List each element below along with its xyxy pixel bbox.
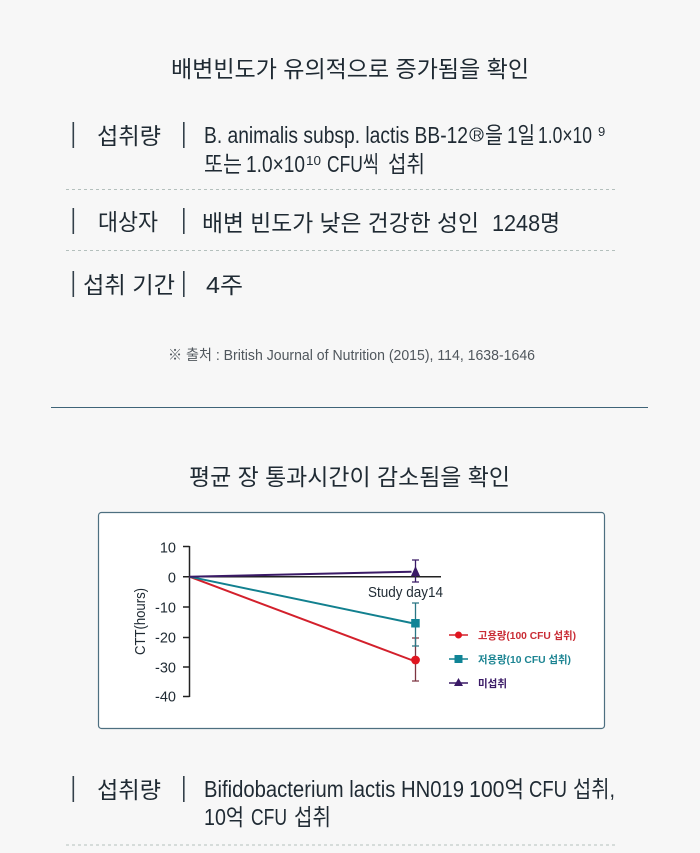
row: intake period: 4주 [206,272,243,298]
row: subjects: 배변 빈도가 낮은 건강한 성인 [202,210,479,236]
row: intake amount second study: 10억 [204,804,244,830]
y axis: -10 [155,600,176,616]
row: subjects: 1248명 [492,210,560,236]
source citation: ※ 출처 : British Journal of Nutrition (2015), 114, 1638-1646 [168,347,535,364]
legend: 미섭취 [478,677,507,690]
row: intake amount: 10 [306,154,321,168]
series: no intake [190,560,420,582]
legend: 저용량(10 CFU 섭취) [478,653,571,666]
series: high dose [190,577,420,681]
row: intake period [72,271,243,298]
row: subjects: 대상자 [98,209,158,235]
row: intake amount second study: Bifidobacterium lactis HN019 [204,776,464,802]
x axis: Study day14 [368,585,443,601]
row: intake amount: 섭취 [388,151,425,177]
row: intake amount: 또는 [204,151,242,177]
y axis: -40 [155,690,176,706]
row: intake amount [72,122,605,177]
registered mark [470,128,483,142]
row: intake amount second study: CFU [529,776,567,802]
row: intake amount: 9 [598,124,605,139]
row: intake amount second study [72,776,615,830]
y axis: 10 [160,540,176,556]
row: intake amount: 1.0×10 [246,151,305,177]
row: intake amount second study: 섭취 [294,804,331,830]
y axis [133,540,190,706]
heading: transit time: 평균 장 통과시간이 감소됨을 확인 [189,464,510,490]
row: intake amount second study: 섭취량 [97,777,161,803]
legend [449,629,576,690]
y axis: -20 [155,630,176,646]
row: intake amount: 1일 [507,122,535,148]
row: intake amount: B. animalis subsp. lactis BB-12 [204,122,468,148]
legend: 고용량(100 CFU 섭취) [478,629,576,642]
y axis: -30 [155,660,176,676]
row: intake amount: CFU씩 [327,151,379,177]
row: intake period: 섭취 기간 [83,272,175,298]
row: intake amount: 섭취량 [97,123,161,149]
row: intake amount second study: 100억 [469,776,524,802]
y axis: 0 [168,570,176,586]
row: intake amount second study: 섭취, [573,776,615,802]
row: intake amount: 을 [485,122,503,148]
row: intake amount second study: CFU [251,804,287,830]
series: low dose [190,577,420,646]
chart panel [98,512,604,728]
row: intake amount: 1.0×10 [538,122,592,148]
heading: bowel frequency: 배변빈도가 유의적으로 증가됨을 확인 [171,56,529,82]
y axis: CTT(hours) [133,588,149,655]
registered mark: R [473,128,482,142]
row: subjects [72,208,560,236]
